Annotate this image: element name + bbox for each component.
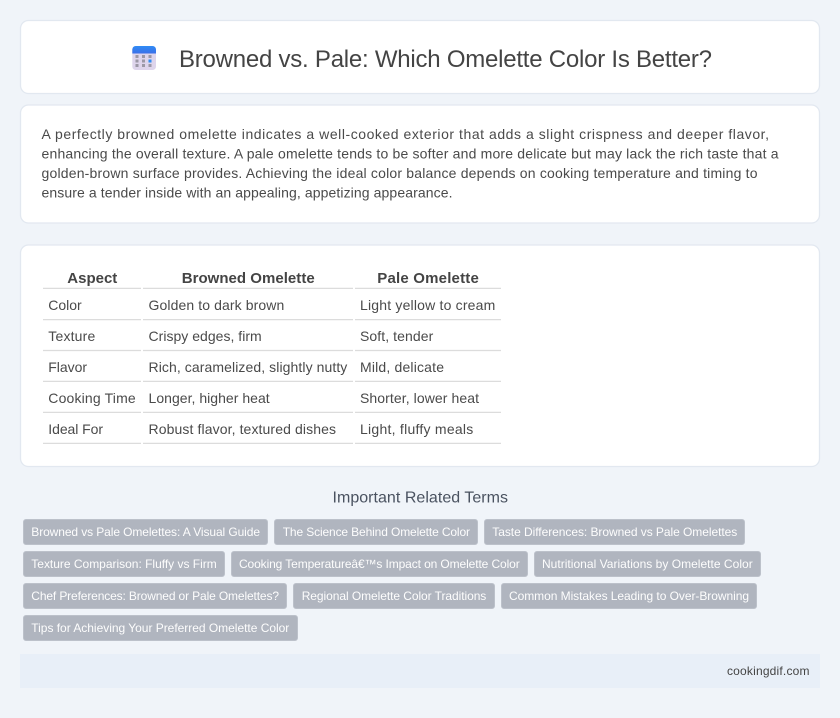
panel: description: [20, 105, 820, 223]
row: ideal for: [48, 421, 473, 437]
text block: description: [42, 126, 779, 200]
row: cooking time: Longer, higher heat: [148, 390, 270, 406]
row: texture: Soft, tender: [360, 328, 434, 344]
tag: Regional Omelette Color Traditions: [302, 589, 486, 603]
row: cooking time: [48, 390, 479, 406]
text block: description: enhancing the overall texture. A pale omelette tends to be softer and more delicate but may lack the rich taste that a: [42, 146, 779, 162]
tag: Nutritional Variations by Omelette Color: [542, 557, 753, 571]
tag: Common Mistakes Leading to Over-Browning: [509, 589, 749, 603]
table header: [67, 270, 479, 287]
title: Browned vs. Pale: Which Omelette Color Is Better?: [179, 46, 712, 73]
row: ideal for: Ideal For: [48, 421, 103, 437]
tag: [534, 552, 760, 576]
row: flavor: Flavor: [48, 359, 87, 375]
row: texture: [48, 328, 434, 344]
tag: Browned vs Pale Omelettes: A Visual Guide: [31, 525, 260, 539]
icon: calendar: [132, 46, 156, 70]
row: texture: Texture: [48, 328, 96, 344]
footer: cookingdif.com: [727, 664, 810, 678]
tag: Taste Differences: Browned vs Pale Omelettes: [492, 525, 737, 539]
row: ideal for: Robust flavor, textured dishes: [148, 421, 336, 437]
tag: Texture Comparison: Fluffy vs Firm: [31, 557, 217, 571]
row: color: [48, 297, 495, 313]
row: color: Golden to dark brown: [148, 297, 284, 313]
tag: [24, 584, 286, 608]
tag: [294, 584, 494, 608]
row: texture: Crispy edges, firm: [148, 328, 262, 344]
row: flavor: [48, 359, 444, 375]
row: color: Color: [48, 297, 82, 313]
tag: Chef Preferences: Browned or Pale Omelettes?: [31, 589, 279, 603]
row: flavor: Mild, delicate: [360, 359, 444, 375]
row: ideal for: Light, fluffy meals: [360, 421, 473, 437]
tag: The Science Behind Omelette Color: [283, 525, 470, 539]
tag: [274, 520, 478, 544]
row: color: Light yellow to cream: [360, 297, 495, 313]
tag: [232, 552, 528, 576]
panel: comparison table: [20, 245, 820, 466]
footer: [20, 654, 820, 688]
tag: [502, 584, 756, 608]
panel: header: [20, 20, 820, 94]
tag: [24, 616, 298, 640]
tag: Cooking Temperatureâ€™s Impact on Omelette Color: [239, 557, 520, 571]
tag: [24, 520, 268, 544]
heading: important related terms: Important Related Terms: [332, 490, 508, 506]
text block: description: golden-brown surface provides. Achieving the ideal color balance depends on cooking temperature and timing to: [42, 165, 758, 181]
panel: related term tags: [24, 520, 760, 640]
tag: [24, 552, 224, 576]
table header: Pale Omelette: [377, 270, 479, 287]
row: cooking time: Shorter, lower heat: [360, 390, 479, 406]
tag: Tips for Achieving Your Preferred Omelette Color: [31, 621, 289, 635]
table header: Aspect: [67, 270, 117, 287]
row: flavor: Rich, caramelized, slightly nutty: [148, 359, 347, 375]
table header: Browned Omelette: [182, 270, 315, 287]
row: cooking time: Cooking Time: [48, 390, 136, 406]
tag: [484, 520, 744, 544]
text block: description: ensure a tender inside with an appealing, appetizing appearance.: [42, 184, 452, 200]
text block: description: A perfectly browned omelette indicates a well-cooked exterior that adds a slight crispness and deeper flavor,: [42, 126, 769, 142]
